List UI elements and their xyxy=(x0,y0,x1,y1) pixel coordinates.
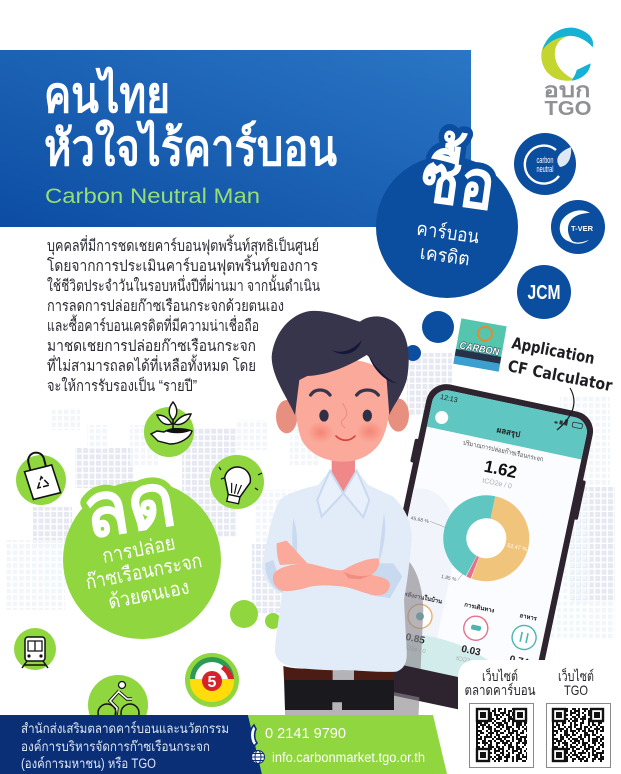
category: food: อาหาร xyxy=(519,612,538,623)
icon: plant in hand xyxy=(144,402,194,457)
body text: จะให้การรับรองเป็น “รายปี” xyxy=(47,376,197,395)
body text: และซื้อคาร์บอนเครดิตที่มีความน่าเชื่อถือ xyxy=(47,314,259,335)
shadow xyxy=(285,553,423,720)
eyes xyxy=(319,410,372,422)
total value: 1.62 xyxy=(482,457,519,482)
text: phone number: 0 2141 9790 xyxy=(265,725,346,742)
total label: ปริมาณการปล่อยก๊าซเรือนกระจก xyxy=(462,439,544,463)
text: reduce description: ด้วยตนเอง xyxy=(107,576,191,614)
icon: train xyxy=(14,628,56,670)
banner: blue title background xyxy=(0,50,471,227)
icon: globe xyxy=(252,750,264,764)
category: travel: การเดินทาง xyxy=(464,600,495,615)
status bar: 12:13 xyxy=(439,394,458,404)
footer organisation text: (องค์การมหาชน) หรือ TGO xyxy=(21,755,156,771)
icon: T-VER badge: T-VER xyxy=(571,224,594,233)
icon: JCM badge: JCM xyxy=(528,282,560,304)
text: website: info.carbonmarket.tgo.or.th xyxy=(272,750,425,765)
logo: TGO xyxy=(541,28,593,120)
category: travel xyxy=(452,600,495,667)
footer organisation text: องค์การบริหารจัดการก๊าซเรือนกระจก xyxy=(21,738,210,754)
text: reduce description xyxy=(84,532,204,614)
category: travel: tCO2e / 0 xyxy=(456,656,483,667)
arrow: label to phone xyxy=(557,388,574,430)
QR code: carbon market xyxy=(470,704,534,768)
decorative green dots xyxy=(230,600,281,629)
text: carbon credit xyxy=(415,218,481,270)
QR code: TGO xyxy=(546,704,610,768)
panel: QR background xyxy=(458,660,621,774)
hair xyxy=(272,311,409,415)
face xyxy=(296,360,389,462)
footer organisation text xyxy=(21,720,229,771)
cuffs xyxy=(265,560,402,598)
phone: CF Calculator app xyxy=(362,380,600,725)
pants xyxy=(283,666,394,710)
text: application label xyxy=(506,333,614,395)
label: carbon market website: ตลาดคาร์บอน xyxy=(464,682,536,698)
donut chart: 52.47 % xyxy=(507,543,528,553)
label: TGO website: TGO xyxy=(564,682,588,698)
label: TGO website: เว็บไซต์ xyxy=(558,667,594,684)
background: digital city pixels xyxy=(5,353,615,640)
body text: ใช้ชีวิตประจำวันในรอบหนึ่งปีที่ผ่านมา จากนั้นดำเนิน xyxy=(47,274,320,295)
footer organisation text: สำนักส่งเสริมตลาดคาร์บอนและนวัตกรรม xyxy=(21,720,229,736)
panel: reduce emissions circle xyxy=(63,457,221,639)
text: carbon credit: คาร์บอน xyxy=(415,218,481,248)
label: carbon market website xyxy=(464,667,536,698)
icon: energy label no.5 xyxy=(185,653,239,707)
icon: recycle bag xyxy=(16,449,66,505)
neck xyxy=(332,457,355,493)
body text: บุคคลที่มีการชดเชยคาร์บอนฟุตพริ้นท์สุทธิเป็นศูนย์ xyxy=(47,234,319,256)
category: home energy: 0.85 xyxy=(404,632,426,647)
heading: reduce: ลด xyxy=(77,457,181,555)
text: application label: Application xyxy=(510,333,596,368)
footer: navy contact band xyxy=(0,715,262,774)
icon: cyclist xyxy=(88,675,148,735)
icon: app tile xyxy=(453,318,507,372)
icon: phone xyxy=(250,725,257,746)
arms xyxy=(273,558,390,595)
unit: tCO2e / 0 xyxy=(482,477,512,491)
donut chart: 45.68 % xyxy=(410,515,430,525)
body text: โดยจากการประเมินคาร์บอนฟุตพริ้นท์ของการ xyxy=(47,254,318,276)
shirt xyxy=(262,470,412,672)
collar xyxy=(317,471,369,517)
category: home energy: พลังงานในบ้าน xyxy=(403,590,444,606)
title: หัวใจไร้คาร์บอน xyxy=(44,119,337,176)
body text: ที่ไม่สามารถลดได้ที่เหลือทั้งหมด โดย xyxy=(47,354,256,375)
text: reduce description: ก๊าซเรือนกระจก xyxy=(84,550,204,594)
icon: carbon neutral badge: carbon xyxy=(536,155,554,165)
title xyxy=(44,66,337,176)
subtitle: Carbon Neutral Man xyxy=(45,185,260,208)
category: home energy: tCO2e / 0 xyxy=(400,644,427,655)
decorative blue dots xyxy=(405,311,454,361)
body text: มาชดเชยการปล่อยก๊าซเรือนกระจก xyxy=(47,337,256,355)
logo: TGO: อบก xyxy=(544,80,590,102)
phone base band xyxy=(393,663,458,705)
fingers xyxy=(277,541,307,565)
icon: carbon neutral badge xyxy=(514,133,576,195)
category: travel: 0.03 xyxy=(460,644,482,659)
text: carbon credit: เครดิต xyxy=(419,243,471,270)
category: food: 0.74 xyxy=(508,654,530,669)
text: reduce description: การปล่อย xyxy=(100,532,177,568)
icon: carbon neutral badge: neutral xyxy=(536,164,554,174)
shirt folds xyxy=(292,513,385,563)
logo: TGO: TGO xyxy=(544,98,592,120)
screen title: ผลสรุป xyxy=(496,425,521,440)
category: home energy xyxy=(392,590,444,657)
donut chart xyxy=(399,480,537,596)
icon: app tile: CARBON xyxy=(459,341,501,358)
label: TGO website xyxy=(558,667,594,698)
panel: buy carbon credit circle xyxy=(376,127,518,298)
icon: JCM badge xyxy=(517,265,571,319)
man illustration xyxy=(262,311,458,720)
brows nose mouth xyxy=(311,390,378,440)
ears xyxy=(276,398,409,433)
title: คนไทย xyxy=(44,66,170,123)
body text: การลดการปล่อยก๊าซเรือนกระจกด้วยตนเอง xyxy=(47,297,284,315)
icon: T-VER badge xyxy=(551,200,605,254)
icon: light bulb xyxy=(210,455,264,509)
category: food xyxy=(506,612,541,669)
footer: green contact band xyxy=(248,715,447,774)
label: carbon market website: เว็บไซต์ xyxy=(482,667,518,684)
donut chart: 1.85 % xyxy=(440,574,457,583)
body text xyxy=(47,234,320,395)
icon: energy label no.5: 5 xyxy=(208,674,217,691)
back button xyxy=(434,410,449,425)
heading: buy: ซื้อ xyxy=(416,127,502,225)
